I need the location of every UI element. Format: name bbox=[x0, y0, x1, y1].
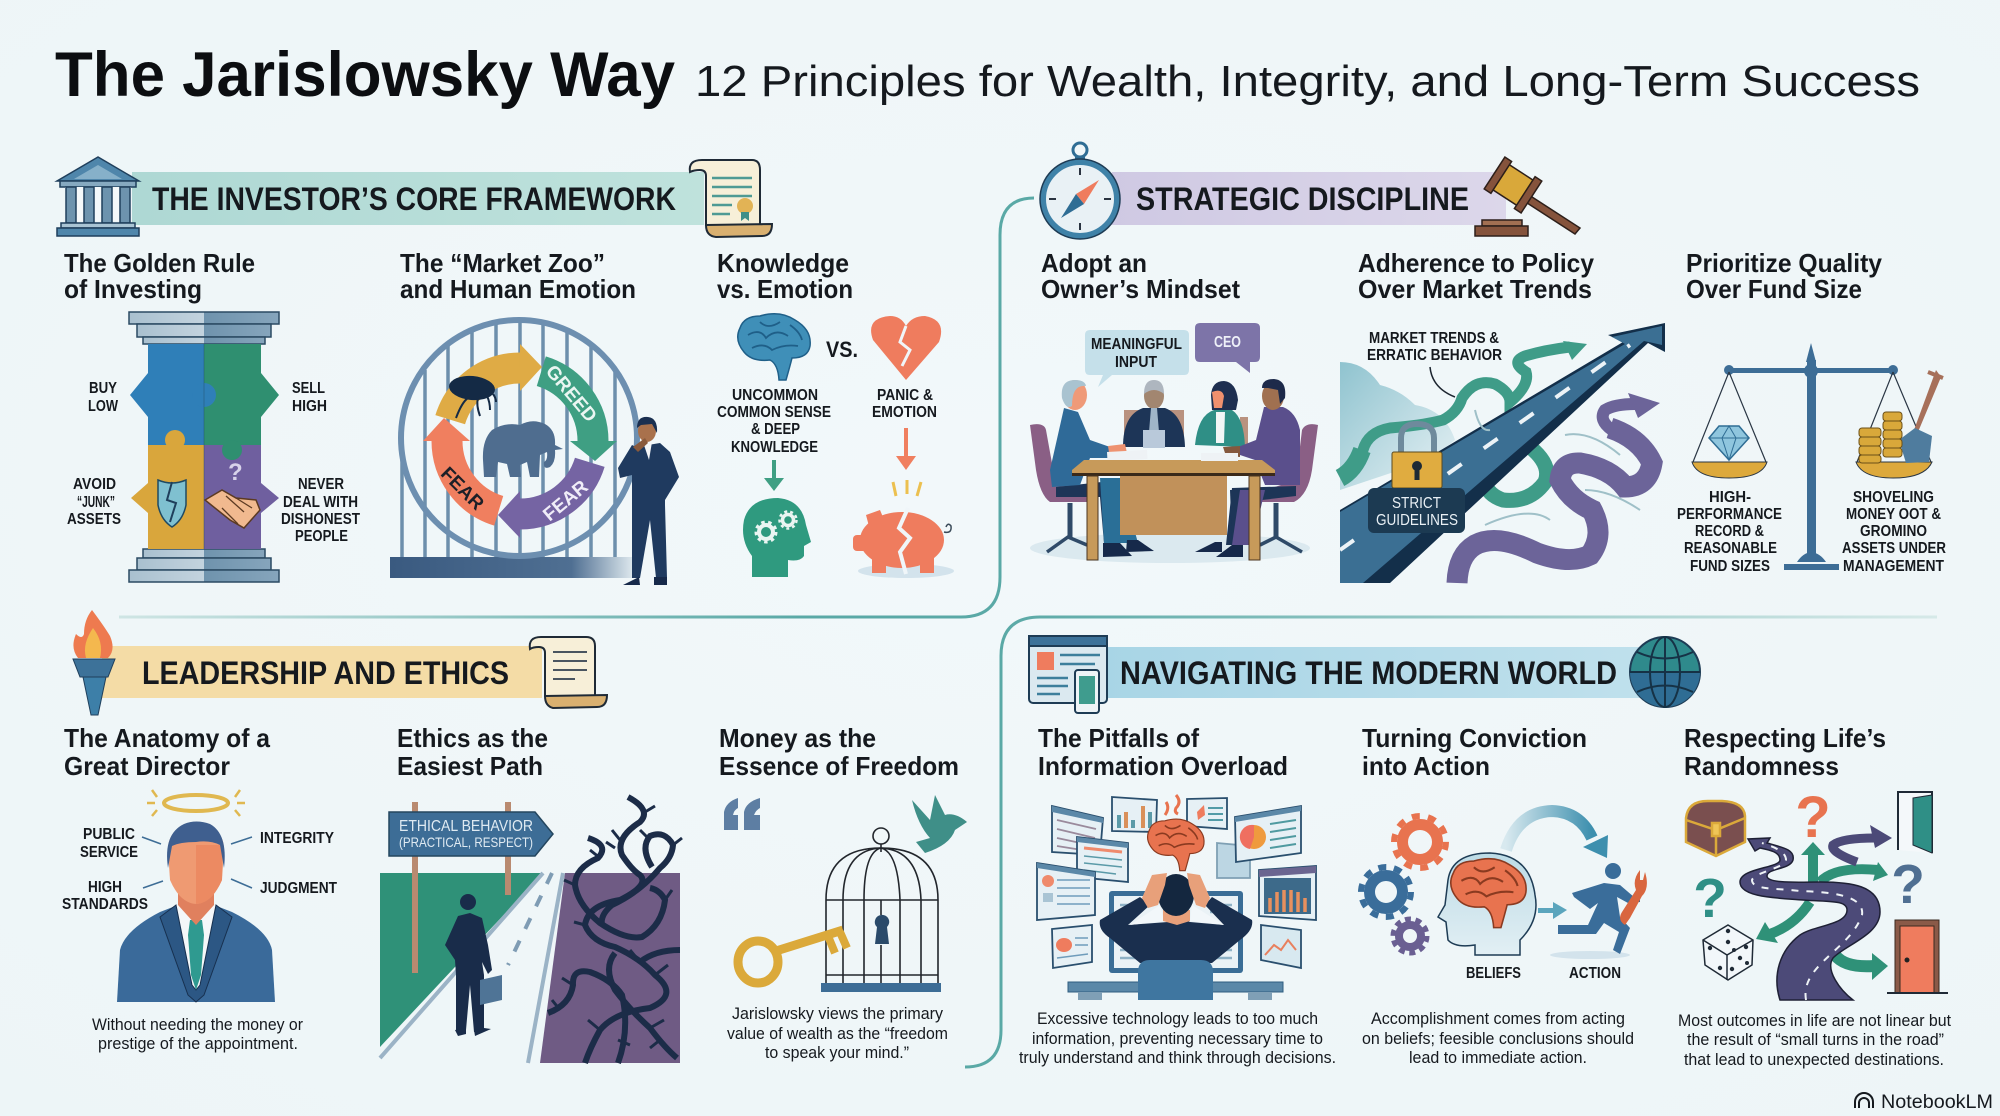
icon: orange brain bbox=[1451, 859, 1526, 928]
text: conviction caption: Accomplishment comes from acting bbox=[1371, 1009, 1625, 1028]
text: randomness caption bbox=[1678, 1011, 1951, 1069]
principle: the pitfalls of information overload bbox=[1019, 723, 1336, 1067]
banner: leadership and ethics: LEADERSHIP AND ETHICS bbox=[142, 655, 509, 691]
label: never deal with dishonest people: DEAL WITH bbox=[283, 494, 358, 511]
icon: flying bird bbox=[912, 795, 967, 853]
icon: compass bbox=[1040, 143, 1120, 239]
icon: flea bbox=[448, 374, 496, 418]
label: high performance record: REASONABLE bbox=[1684, 540, 1777, 557]
icon: elephant bbox=[483, 421, 563, 477]
heading bbox=[1038, 723, 1288, 781]
icon: question marks bbox=[1693, 785, 1925, 929]
icon: globe bbox=[1630, 637, 1700, 707]
panel: strategic discipline bbox=[1030, 143, 1946, 583]
heading: Owner’s Mindset bbox=[1041, 274, 1240, 304]
icon: open cage bbox=[821, 828, 941, 992]
label: avoid junk assets: AVOID bbox=[73, 476, 116, 493]
principle: the golden rule of investing bbox=[64, 248, 360, 582]
label: uncommon common sense and deep knowledge: KNOWLEDGE bbox=[731, 439, 818, 456]
text: appointment caption: Without needing the money or bbox=[92, 1015, 303, 1034]
icon: quote marks bbox=[724, 798, 760, 830]
label: high standards bbox=[62, 879, 148, 913]
label: uncommon common sense and deep knowledge: COMMON SENSE bbox=[717, 404, 831, 421]
chairs bbox=[1030, 410, 1318, 552]
label: vs: VS. bbox=[826, 337, 858, 362]
icon: dice bbox=[1703, 925, 1753, 980]
heading: Information Overload bbox=[1038, 751, 1288, 781]
label: shoveling money: SHOVELING bbox=[1853, 489, 1934, 506]
heading: Randomness bbox=[1684, 751, 1839, 781]
panel: the investor's core framework bbox=[57, 157, 954, 585]
label: public service bbox=[80, 826, 138, 861]
label: never deal with dishonest people: NEVER bbox=[298, 476, 344, 493]
heading: Ethics as the bbox=[397, 723, 548, 753]
label: never deal with dishonest people bbox=[281, 476, 360, 545]
principle: ethics as the easiest path bbox=[380, 723, 682, 1063]
heading: vs. Emotion bbox=[717, 274, 853, 304]
callout: meaningful input: MEANINGFUL bbox=[1091, 336, 1182, 353]
label: panic and emotion bbox=[872, 387, 937, 421]
text: randomness caption: Most outcomes in life are not linear but bbox=[1678, 1011, 1951, 1030]
heading: Adherence to Policy bbox=[1358, 248, 1594, 278]
icon: orange door bbox=[1887, 920, 1948, 994]
callout: ceo: CEO bbox=[1214, 334, 1241, 351]
heading: Easiest Path bbox=[397, 751, 543, 781]
heading: Prioritize Quality bbox=[1686, 248, 1883, 278]
label: strict guidelines: STRICT bbox=[1392, 495, 1441, 512]
label: never deal with dishonest people: PEOPLE bbox=[295, 528, 348, 545]
icon: golden key bbox=[738, 930, 847, 983]
sign: ethical behavior bbox=[389, 812, 553, 856]
label: uncommon common sense and deep knowledge bbox=[717, 387, 831, 456]
illustration: puzzle pillar bbox=[67, 312, 360, 582]
table bbox=[1072, 453, 1275, 560]
label: panic and emotion: PANIC & bbox=[877, 387, 933, 404]
heading bbox=[1358, 248, 1594, 304]
icon: blue brain bbox=[738, 314, 810, 380]
title bbox=[55, 40, 1920, 110]
monitor bbox=[1109, 891, 1243, 973]
icon: scroll bbox=[530, 637, 607, 708]
heading bbox=[397, 723, 548, 781]
text: overload caption: Excessive technology leads to too much bbox=[1037, 1009, 1318, 1028]
label: avoid junk assets: “JUNK” bbox=[77, 494, 115, 511]
label: high performance record: FUND SIZES bbox=[1690, 558, 1770, 575]
icon: padlock bbox=[1392, 424, 1442, 488]
label: panic and emotion: EMOTION bbox=[872, 404, 937, 421]
illustration: boardroom meeting bbox=[1030, 323, 1318, 563]
label: public service: PUBLIC bbox=[83, 826, 135, 843]
label: public service: SERVICE bbox=[80, 844, 138, 861]
person: woman director bbox=[1195, 381, 1245, 447]
icon: broken piggy bank bbox=[853, 480, 954, 578]
text: randomness caption: that lead to unexpected destinations. bbox=[1684, 1050, 1944, 1069]
text: freedom caption bbox=[727, 1004, 948, 1062]
floating screens bbox=[1037, 797, 1316, 968]
label: high performance record bbox=[1677, 489, 1782, 575]
banner: strategic discipline: STRATEGIC DISCIPLINE bbox=[1136, 181, 1469, 217]
illustration: hamster wheel cycle: GREED bbox=[541, 361, 601, 427]
road: winding path bbox=[1740, 838, 1880, 1000]
panel: navigating the modern world bbox=[1019, 636, 1951, 1069]
text: conviction caption bbox=[1362, 1009, 1634, 1067]
icon: gavel bbox=[1475, 157, 1580, 236]
heading: Essence of Freedom bbox=[719, 751, 959, 781]
principle: money as the essence of freedom bbox=[719, 723, 967, 1062]
heading: of Investing bbox=[64, 274, 202, 304]
label: uncommon common sense and deep knowledge: UNCOMMON bbox=[732, 387, 818, 404]
title: The Jarislowsky Way bbox=[55, 40, 675, 110]
icon: diploma scroll bbox=[690, 160, 772, 237]
illustration: director portrait bbox=[62, 790, 337, 1002]
arrow: brain to runner bbox=[1538, 902, 1567, 919]
sign: ethical behavior: (PRACTICAL, RESPECT) bbox=[399, 834, 533, 850]
icon: coins and shovel bbox=[1859, 370, 1943, 463]
heading bbox=[64, 248, 255, 304]
label: market trends and erratic behavior bbox=[1367, 330, 1502, 397]
banner: navigating the modern world: NAVIGATING THE MODERN WORLD bbox=[1120, 655, 1617, 691]
principle: knowledge vs emotion bbox=[717, 248, 954, 578]
text: freedom caption: to speak your mind.” bbox=[765, 1043, 909, 1062]
text: overload caption: truly understand and think through decisions. bbox=[1019, 1048, 1336, 1067]
arrow: beliefs arc bbox=[1506, 811, 1608, 858]
label: buy low: LOW bbox=[88, 398, 119, 415]
heading bbox=[400, 248, 636, 304]
icon: green door bbox=[1898, 792, 1932, 853]
heading bbox=[1686, 248, 1883, 304]
icon: question marks: ? bbox=[1693, 867, 1727, 929]
person: stressed worker bbox=[1100, 873, 1252, 1000]
illustration: overloaded worker bbox=[1037, 795, 1316, 1000]
illustration: hamster wheel cycle: FEAR bbox=[436, 463, 488, 515]
label: uncommon common sense and deep knowledge: & DEEP bbox=[751, 421, 800, 438]
heading: The Pitfalls of bbox=[1038, 723, 1199, 753]
label: avoid junk assets bbox=[67, 476, 121, 528]
heading: The Golden Rule bbox=[64, 248, 255, 278]
icon: browser and phone bbox=[1029, 636, 1107, 713]
heading: Turning Conviction bbox=[1362, 723, 1587, 753]
label: buy low bbox=[88, 380, 119, 415]
label: shoveling money: ASSETS UNDER bbox=[1842, 540, 1946, 557]
label: high performance record: HIGH- bbox=[1709, 489, 1751, 506]
icon: temple bbox=[57, 157, 139, 236]
banner: strategic discipline bbox=[1040, 143, 1580, 239]
label: buy low: BUY bbox=[89, 380, 117, 397]
logo: NotebookLM: NotebookLM bbox=[1881, 1092, 1993, 1113]
illustration: hamster wheel cycle: FEAR bbox=[539, 476, 593, 526]
arrow: down to head bbox=[764, 460, 784, 491]
icon: treasure chest bbox=[1686, 801, 1745, 856]
label: shoveling money bbox=[1842, 489, 1946, 575]
heading bbox=[1362, 723, 1587, 781]
callout: ceo bbox=[1195, 323, 1260, 373]
label: high standards: HIGH bbox=[88, 879, 122, 896]
heading: Adopt an bbox=[1041, 248, 1147, 278]
icon: torch bbox=[73, 610, 115, 715]
principle: the market zoo and human emotion bbox=[390, 248, 679, 585]
illustration: hamster wheel cycle bbox=[390, 320, 679, 585]
icon: head with gears bbox=[743, 498, 811, 577]
heading: Over Market Trends bbox=[1358, 274, 1592, 304]
label: high standards: STANDARDS bbox=[62, 896, 148, 913]
heading bbox=[717, 248, 853, 304]
heading: The “Market Zoo” bbox=[400, 248, 605, 278]
icon: gears bbox=[1361, 816, 1446, 953]
label: never deal with dishonest people: DISHONEST bbox=[281, 511, 360, 528]
heading bbox=[719, 723, 959, 781]
label: sell high bbox=[292, 380, 327, 415]
text: randomness caption: the result of “small turns in the road” bbox=[1687, 1030, 1944, 1049]
icon: head profile bbox=[1438, 853, 1536, 955]
text: overload caption: information, preventing necessary time to bbox=[1032, 1029, 1323, 1048]
text: freedom caption: Jarislowsky views the primary bbox=[732, 1004, 943, 1023]
callout: meaningful input: INPUT bbox=[1115, 354, 1157, 371]
banner: leadership and ethics bbox=[73, 610, 607, 715]
text: appointment caption bbox=[92, 1015, 303, 1053]
heading: into Action bbox=[1362, 751, 1490, 781]
arrows: branching choices bbox=[1756, 825, 1892, 980]
principle: respecting life's randomness bbox=[1678, 723, 1951, 1069]
heading bbox=[1041, 248, 1240, 304]
heading: and Human Emotion bbox=[400, 274, 636, 304]
label: strict guidelines: GUIDELINES bbox=[1376, 512, 1458, 529]
label: shoveling money: MANAGEMENT bbox=[1843, 558, 1944, 575]
icon: question marks: ? bbox=[1891, 853, 1925, 915]
label: action: ACTION bbox=[1569, 965, 1621, 982]
person: walking businessman bbox=[445, 894, 502, 1036]
icon: running figure bbox=[1550, 863, 1647, 959]
illustration: beliefs to action bbox=[1361, 811, 1647, 982]
illustration: road versus erratic paths bbox=[1340, 323, 1665, 583]
callout: meaningful input bbox=[1085, 330, 1189, 387]
principle: the anatomy of a great director bbox=[62, 723, 337, 1053]
label: high performance record: PERFORMANCE bbox=[1677, 506, 1782, 523]
icon: thinking investor bbox=[618, 417, 679, 585]
icon: orange brain bbox=[1148, 819, 1204, 871]
heading: Over Fund Size bbox=[1686, 274, 1862, 304]
heading bbox=[1684, 723, 1886, 781]
heading: Respecting Life’s bbox=[1684, 723, 1886, 753]
text: overload caption bbox=[1019, 1009, 1336, 1067]
illustration: balance scale bbox=[1677, 343, 1946, 575]
banner: navigating the modern world bbox=[1029, 636, 1700, 713]
text: conviction caption: on beliefs; feesible conclusions should bbox=[1362, 1029, 1634, 1048]
label: high performance record: RECORD & bbox=[1695, 523, 1764, 540]
title: 12 Principles for Wealth, Integrity, and Long-Term Success bbox=[695, 57, 1920, 106]
icon: question marks: ? bbox=[1795, 785, 1831, 850]
sign: ethical behavior: ETHICAL BEHAVIOR bbox=[399, 818, 533, 835]
label: market trends and erratic behavior: MARKET TRENDS & bbox=[1369, 330, 1499, 347]
principle: prioritize quality over fund size bbox=[1677, 248, 1946, 575]
label: avoid junk assets: ASSETS bbox=[67, 511, 121, 528]
principle: adopt an owner's mindset bbox=[1030, 248, 1318, 563]
person: center director bbox=[1123, 380, 1185, 448]
label: market trends and erratic behavior: ERRATIC BEHAVIOR bbox=[1367, 347, 1502, 364]
icon: halo bbox=[147, 790, 245, 816]
text: freedom caption: value of wealth as the “freedom bbox=[727, 1024, 948, 1043]
arrow: down to piggy bbox=[896, 428, 916, 470]
person: left director bbox=[1050, 380, 1154, 557]
text: appointment caption: prestige of the appointment. bbox=[98, 1034, 298, 1053]
illustration: winding road of chance bbox=[1686, 785, 1948, 1000]
banner: the investor's core framework: THE INVESTOR’S CORE FRAMEWORK bbox=[152, 181, 676, 217]
heading: The Anatomy of a bbox=[64, 723, 271, 753]
label: strict guidelines bbox=[1368, 488, 1465, 533]
label: beliefs: BELIEFS bbox=[1466, 965, 1521, 982]
label: sell high: SELL bbox=[292, 380, 325, 397]
label: shoveling money: MONEY OOT & bbox=[1846, 506, 1941, 523]
heading: Knowledge bbox=[717, 248, 849, 278]
label: sell high: HIGH bbox=[292, 398, 327, 415]
icon: stress marks bbox=[1165, 795, 1179, 815]
label: integrity: INTEGRITY bbox=[260, 830, 334, 847]
principle: adherence to policy over market trends bbox=[1340, 248, 1665, 583]
heading: Great Director bbox=[64, 751, 230, 781]
person: right director bbox=[1195, 379, 1300, 557]
panel: leadership and ethics bbox=[62, 610, 967, 1063]
illustration: puzzle pillar: ? bbox=[228, 459, 243, 486]
principle: turning conviction into action bbox=[1361, 723, 1647, 1067]
heading bbox=[64, 723, 271, 781]
banner: the investor's core framework bbox=[57, 157, 772, 237]
label: shoveling money: GROMINO bbox=[1860, 523, 1927, 540]
text: conviction caption: lead to immediate action. bbox=[1409, 1048, 1587, 1067]
label: judgment: JUDGMENT bbox=[260, 880, 337, 897]
illustration: clear road versus thorns bbox=[380, 797, 682, 1063]
heading: Money as the bbox=[719, 723, 876, 753]
icon: broken heart bbox=[871, 316, 941, 380]
icon: diamond bbox=[1709, 426, 1749, 460]
